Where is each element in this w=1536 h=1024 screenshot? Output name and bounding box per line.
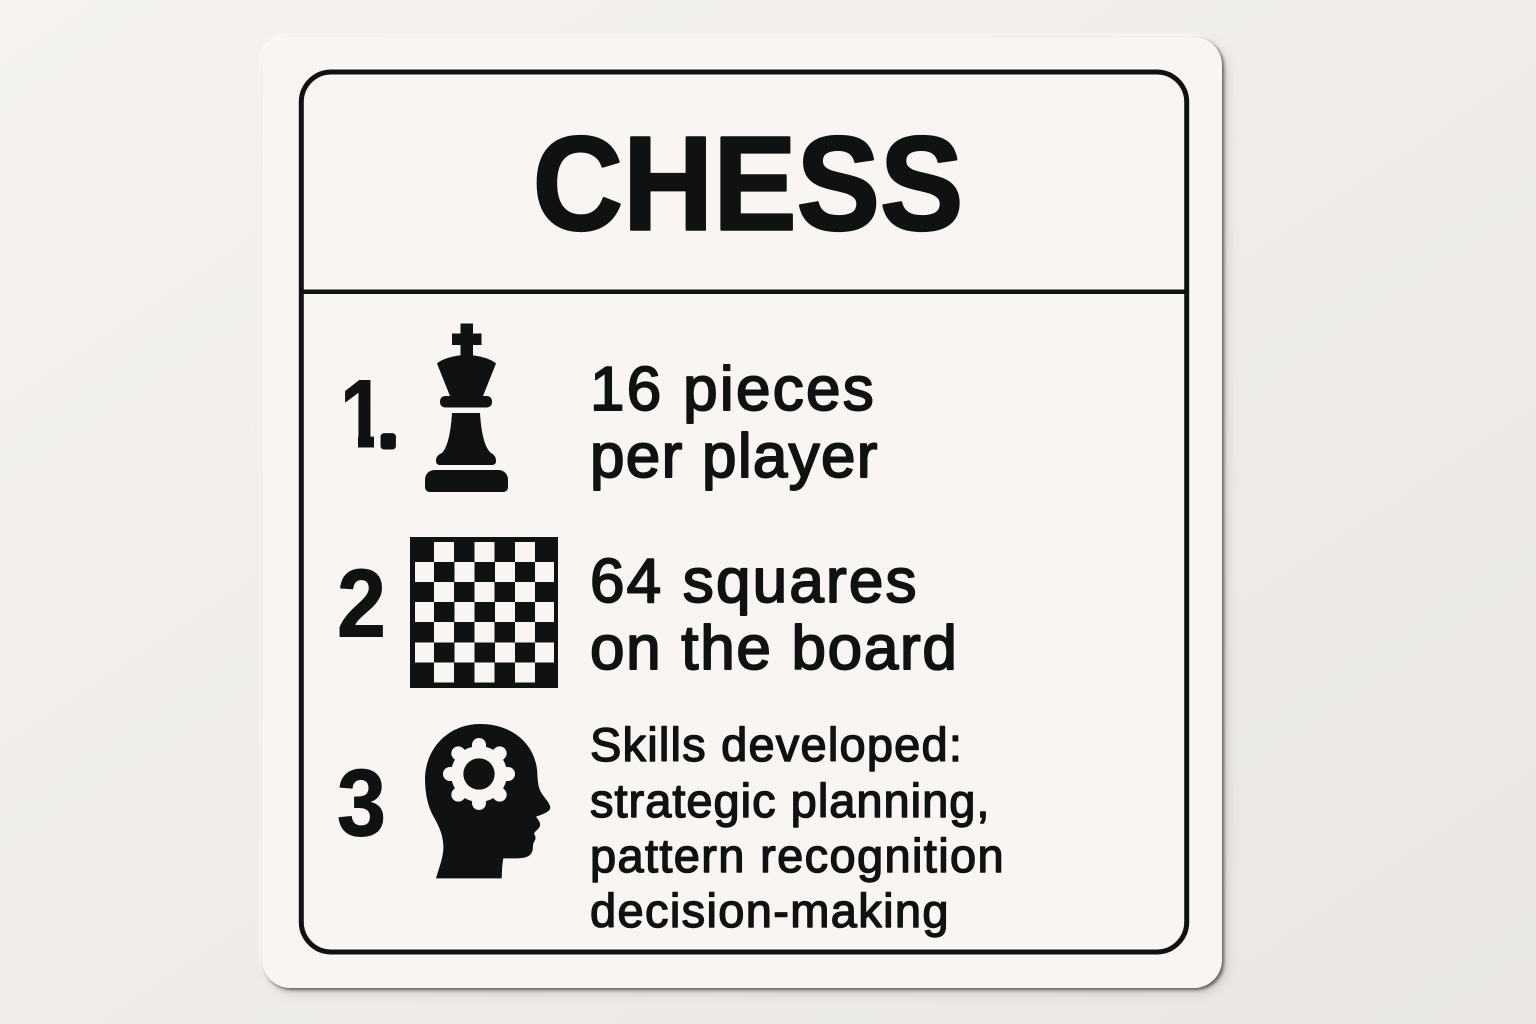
- icon: head with gear: [425, 724, 550, 878]
- text: skills list: pattern recognition: [590, 829, 1005, 882]
- icon: chess board: [410, 537, 558, 688]
- number 2: 2: [337, 549, 386, 657]
- number 1: .: [376, 366, 400, 465]
- text: 64 squares on the board: on the board: [590, 614, 959, 683]
- title: CHESS: [533, 110, 963, 258]
- icon: chess king: [425, 324, 508, 492]
- text: 64 squares on the board: [590, 547, 959, 683]
- number 3: 3: [337, 750, 386, 856]
- text: skills list: [590, 718, 1005, 937]
- row 1: sixteen pieces: [340, 324, 879, 492]
- text: skills list: decision-making: [590, 884, 950, 937]
- text: 64 squares on the board: 64 squares: [590, 547, 919, 616]
- row 3: skills developed: [337, 718, 1005, 937]
- text: 16 pieces per player: per player: [590, 422, 879, 491]
- row 2: sixty-four squares: [337, 537, 959, 688]
- text: skills list: Skills developed:: [590, 718, 963, 771]
- text: 16 pieces per player: [590, 355, 879, 491]
- number 1: [345, 380, 396, 450]
- card edge shadow: [264, 39, 1224, 990]
- text: 16 pieces per player: 16 pieces: [590, 355, 876, 424]
- card highlight: [259, 34, 1219, 985]
- card panel: [262, 37, 1222, 988]
- text: skills list: strategic planning,: [590, 774, 990, 827]
- number 1: 1: [340, 359, 385, 468]
- inner border frame: [301, 72, 1187, 952]
- card shadow: [268, 44, 1226, 992]
